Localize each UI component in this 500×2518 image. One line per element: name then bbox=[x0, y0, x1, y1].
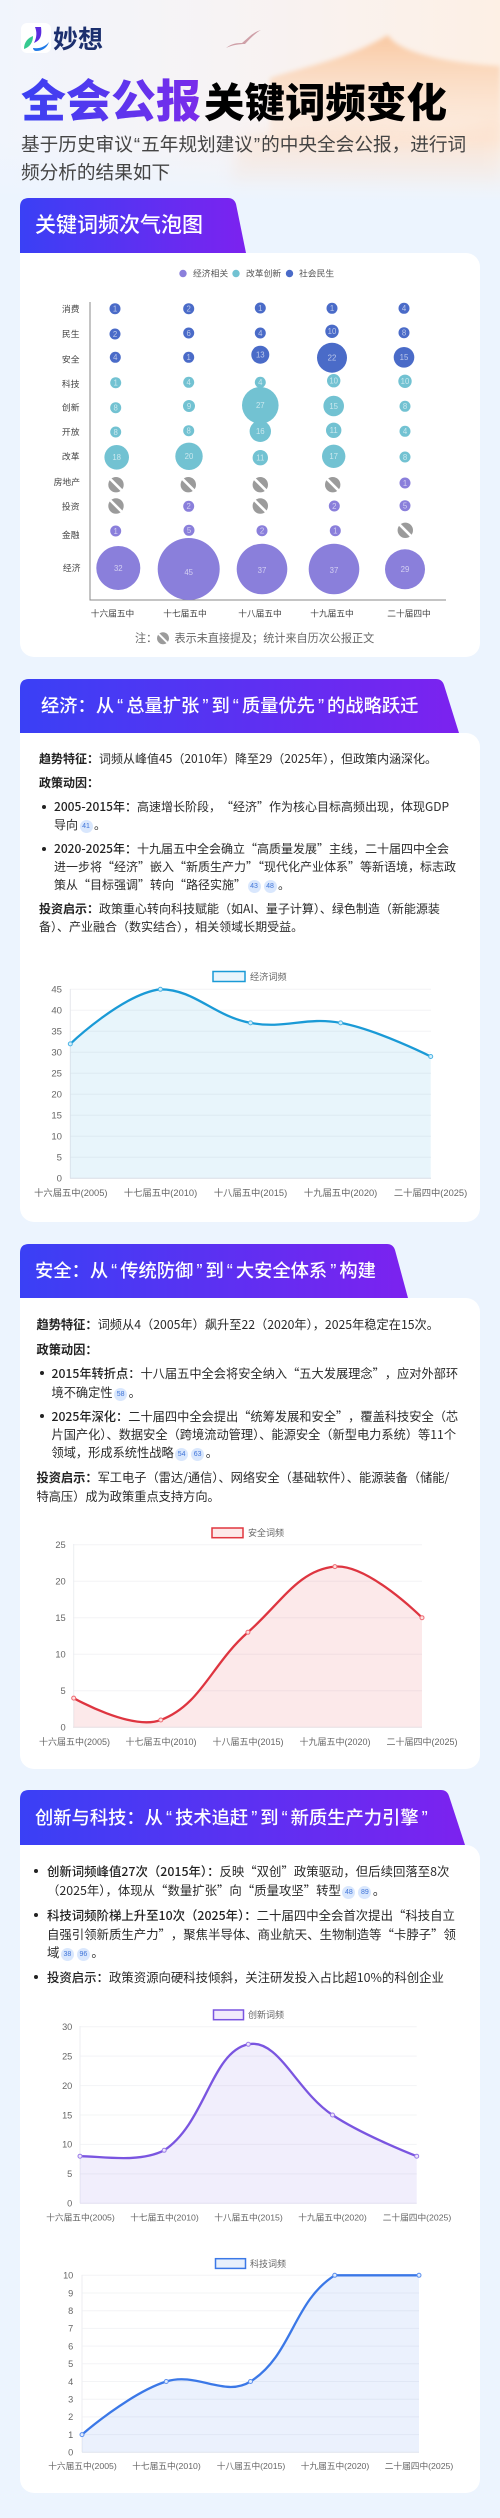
area and line bbox=[80, 2273, 421, 2452]
y labels: 开放 bbox=[62, 426, 80, 437]
text block: innovation and technology: 科技词频阶梯上升至10次（2025年）：二十届四中全会首次提出“科技自立 bbox=[47, 1906, 455, 1924]
text block: innovation and technology: 89 bbox=[361, 1889, 369, 1896]
y axis labels bbox=[51, 985, 62, 1185]
bubble values: 4 bbox=[403, 427, 408, 436]
text block: security: 片国产化）、数据安全（跨境流动管理）、能源安全（新型电力系统）等11个 bbox=[52, 1425, 456, 1443]
bubble values: 2 bbox=[260, 526, 264, 536]
y axis labels: 30 bbox=[51, 1048, 62, 1059]
text block: economy: 43 bbox=[250, 883, 258, 890]
x axis labels: 十八届五中(2015) bbox=[217, 2460, 285, 2471]
y axis labels: 35 bbox=[51, 1027, 62, 1038]
y axis labels: 3 bbox=[68, 2394, 73, 2404]
y axis labels: 1 bbox=[68, 2430, 73, 2440]
y axis labels: 7 bbox=[68, 2324, 73, 2334]
x labels: 十七届五中 bbox=[163, 607, 207, 618]
bubble chart bbox=[54, 268, 446, 645]
x axis labels bbox=[39, 1736, 458, 1747]
bubble values: 8 bbox=[187, 426, 191, 436]
y labels: 金融 bbox=[62, 529, 80, 540]
legend: 科技词频 bbox=[250, 2258, 286, 2269]
y axis labels: 0 bbox=[67, 2199, 72, 2209]
y axis labels: 25 bbox=[62, 2051, 72, 2061]
y axis labels: 15 bbox=[62, 2110, 72, 2120]
x axis labels: 二十届四中(2025) bbox=[386, 1736, 458, 1747]
legend bbox=[214, 2009, 284, 2020]
legend bbox=[213, 971, 287, 982]
y axis labels bbox=[63, 2271, 73, 2458]
x labels: 十八届五中 bbox=[238, 607, 282, 618]
bubble values: 10 bbox=[328, 327, 337, 336]
text block: economy: 政策动因： bbox=[39, 774, 99, 791]
logo wordmark: 妙想 bbox=[53, 20, 103, 56]
x axis labels: 十九届五中(2020) bbox=[304, 1187, 377, 1198]
text block: security: 特高压）成为政策重点支持方向。 bbox=[36, 1486, 220, 1504]
axes bbox=[90, 302, 446, 600]
y axis labels: 10 bbox=[55, 1650, 66, 1660]
legend bbox=[216, 2258, 286, 2269]
text block: innovation and technology: 48 bbox=[345, 1889, 353, 1896]
bubble values: 13 bbox=[256, 350, 265, 360]
card: economy bbox=[20, 733, 480, 1222]
bubble values: 11 bbox=[330, 426, 338, 435]
bubble values: 17 bbox=[329, 452, 338, 461]
y labels bbox=[54, 303, 81, 573]
legend: 创新词频 bbox=[248, 2009, 284, 2020]
y axis labels: 5 bbox=[68, 2359, 73, 2369]
title: 全会公报 bbox=[21, 65, 201, 130]
x axis labels: 十九届五中(2020) bbox=[299, 1736, 371, 1747]
area and line bbox=[78, 2042, 419, 2203]
x labels: 十九届五中 bbox=[310, 607, 354, 618]
text block: economy: 2005-2015年：高速增长阶段，“经济”作为核心目标高频出现，体现GDP bbox=[54, 798, 449, 815]
line chart: economy bbox=[34, 970, 467, 1198]
text block: innovation and technology: 创新词频峰值27次（2015年）：反映“双创”政策驱动，但后续回落至8次 bbox=[47, 1862, 449, 1880]
bubble values: 10 bbox=[401, 377, 410, 386]
bubble values: 15 bbox=[400, 353, 409, 362]
text block: innovation and technology: 96 bbox=[79, 1951, 87, 1958]
text block: security bbox=[36, 1315, 458, 1504]
text block: economy: 41 bbox=[82, 823, 90, 830]
bubble values: 1 bbox=[403, 479, 407, 488]
bubble values: 1 bbox=[258, 304, 262, 313]
x axis labels: 十六届五中(2005) bbox=[39, 1736, 110, 1747]
text block: innovation and technology: 38 bbox=[63, 1951, 71, 1958]
y axis labels: 15 bbox=[55, 1613, 66, 1623]
bubble values: 4 bbox=[113, 353, 118, 362]
heading: economy bbox=[20, 679, 459, 733]
y axis labels: 4 bbox=[68, 2377, 73, 2387]
y axis labels: 10 bbox=[63, 2271, 73, 2281]
text block: economy: 投资启示：政策重心转向科技赋能（如AI、量子计算）、绿色制造（新能源装 bbox=[39, 900, 440, 917]
text block: innovation and technology: 投资启示：政策资源向硬科技倾斜，关注研发投入占比超10%的科创企业 bbox=[47, 1968, 444, 1986]
bubble values: 1 bbox=[113, 304, 117, 314]
bubbles: economy bbox=[96, 478, 425, 600]
y axis labels: 10 bbox=[62, 2140, 72, 2150]
bubble values: 8 bbox=[114, 404, 118, 412]
x axis labels bbox=[34, 1187, 467, 1198]
x axis labels: 十七届五中(2010) bbox=[124, 1187, 197, 1198]
text block: security: 58 bbox=[117, 1390, 124, 1398]
x axis labels: 十八届五中(2015) bbox=[212, 1736, 284, 1747]
y axis labels: 0 bbox=[61, 1723, 66, 1733]
bubble values: 1 bbox=[114, 527, 118, 536]
bubble values: 22 bbox=[328, 354, 336, 362]
bubble values: 2 bbox=[187, 502, 191, 511]
y axis labels: 6 bbox=[68, 2341, 73, 2351]
x axis labels: 二十届四中(2025) bbox=[385, 2460, 453, 2471]
y labels: 改革 bbox=[62, 450, 80, 462]
heading: innovation and technology: 创新与科技：从“技术追赶”到“新质生产力引擎” bbox=[35, 1807, 428, 1828]
y labels: 创新 bbox=[62, 402, 80, 412]
x axis labels bbox=[46, 2211, 451, 2222]
bubble values: 8 bbox=[403, 453, 407, 462]
bubble values: 4 bbox=[258, 378, 263, 387]
subtitle: 频分析的结果如下 bbox=[21, 162, 170, 183]
x axis labels: 十七届五中(2010) bbox=[130, 2211, 199, 2222]
y axis labels: 20 bbox=[51, 1090, 62, 1101]
x labels: 十六届五中 bbox=[91, 607, 134, 618]
bubble values: 8 bbox=[402, 328, 406, 338]
heading: innovation and technology bbox=[20, 1790, 465, 1845]
y labels: 房地产 bbox=[54, 476, 80, 487]
bubble values: 29 bbox=[401, 565, 409, 574]
line chart: security bbox=[39, 1527, 458, 1747]
bubble values: 16 bbox=[256, 427, 265, 436]
x axis labels: 十六届五中(2005) bbox=[34, 1187, 107, 1198]
title bbox=[21, 65, 447, 130]
y labels: 科技 bbox=[62, 378, 80, 389]
y axis labels: 45 bbox=[51, 985, 62, 996]
x axis labels: 十九届五中(2020) bbox=[301, 2460, 369, 2471]
y labels: 投资 bbox=[62, 500, 80, 512]
subtitle: 基于历史审议“五年规划建议”的中央全会公报，进行词 bbox=[21, 134, 466, 155]
bubble values: 32 bbox=[114, 564, 123, 573]
text block: economy: 趋势特征：词频从峰值45（2010年）降至29（2025年），但政策内涵深化。 bbox=[39, 750, 437, 767]
bubble values: 37 bbox=[258, 566, 266, 575]
line chart: innovation bbox=[46, 2009, 451, 2222]
y axis labels: 9 bbox=[68, 2288, 73, 2298]
bubble values: 5 bbox=[187, 526, 192, 535]
text block: security: 54 bbox=[178, 1451, 186, 1458]
y axis labels: 5 bbox=[57, 1153, 62, 1164]
bubble values: 1 bbox=[333, 526, 337, 536]
legend bbox=[179, 268, 334, 279]
bubble values: 1 bbox=[114, 378, 118, 388]
x axis labels: 十九届五中(2020) bbox=[298, 2211, 367, 2222]
x axis labels: 十七届五中(2010) bbox=[125, 1736, 197, 1747]
text block: security: 2025年深化：二十届四中全会提出“统筹发展和安全”，覆盖科技安全（芯 bbox=[52, 1406, 458, 1424]
card: innovation and technology bbox=[20, 1845, 480, 2493]
x axis labels bbox=[48, 2460, 453, 2471]
bubbles: society bbox=[110, 302, 414, 373]
text block: security: 2015年转折点：十八届五中全会将安全纳入“五大发展理念”，应对外部环 bbox=[52, 1364, 458, 1382]
area and line bbox=[72, 1565, 424, 1727]
y axis labels: 40 bbox=[51, 1006, 62, 1017]
text block: security: 领域，形成系统性战略 。 bbox=[52, 1443, 218, 1461]
y axis labels: 15 bbox=[51, 1111, 62, 1122]
text block: security: 境不确定性 。 bbox=[52, 1382, 141, 1400]
text block: security: 政策动因： bbox=[36, 1340, 98, 1358]
text block: economy: 策从“目标强调”转向“路径实施” 。 bbox=[54, 876, 290, 893]
x axis labels: 二十届四中(2025) bbox=[383, 2211, 451, 2222]
y axis labels: 2 bbox=[68, 2412, 73, 2422]
y axis labels bbox=[55, 1540, 66, 1733]
bubble values: 6 bbox=[187, 329, 191, 338]
y labels: 安全 bbox=[62, 354, 80, 364]
bubble values: 37 bbox=[330, 566, 338, 575]
bubble values: 45 bbox=[184, 568, 194, 577]
y axis labels: 30 bbox=[62, 2022, 72, 2032]
text block: innovation and technology bbox=[34, 1862, 456, 1986]
legend bbox=[212, 1527, 284, 1538]
note: 表示未直接提及；统计来自历次公报正文 bbox=[174, 631, 374, 645]
title: 关键词频变化 bbox=[204, 70, 447, 129]
text block: economy: 2020-2025年：十九届五中全会确立“高质量发展”主线，二十届四中全会 bbox=[54, 840, 449, 857]
subtitle bbox=[21, 134, 466, 183]
note: 注： bbox=[135, 631, 157, 645]
bubble values: 4 bbox=[258, 329, 263, 338]
area and line bbox=[68, 987, 433, 1178]
text block: innovation and technology: （2025年），体现从“数量扩张”向“质量攻坚”转型 。 bbox=[47, 1881, 385, 1899]
bubble values: 18 bbox=[112, 453, 121, 462]
y axis labels bbox=[62, 2022, 72, 2209]
bubble values: 11 bbox=[256, 454, 264, 462]
bubble values: 4 bbox=[187, 378, 192, 387]
text block: innovation and technology: 域 。 bbox=[47, 1943, 104, 1961]
heading: bubble chart: 关键词频次气泡图 bbox=[35, 214, 203, 237]
x labels: 二十届四中 bbox=[387, 607, 431, 618]
x axis labels: 十六届五中(2005) bbox=[48, 2460, 117, 2471]
bubble values: 8 bbox=[403, 402, 407, 411]
bubble values: 20 bbox=[185, 452, 194, 461]
bubbles: reform and innovation bbox=[104, 374, 412, 470]
bubble values: 8 bbox=[114, 428, 118, 437]
panel: innovation and technology bbox=[20, 1790, 480, 2493]
bubble values: 10 bbox=[329, 376, 339, 386]
text block: security: 63 bbox=[194, 1451, 202, 1458]
y axis labels: 20 bbox=[55, 1576, 66, 1586]
text block: economy bbox=[39, 750, 456, 935]
panel: security bbox=[20, 1244, 480, 1769]
heading: economy: 经济：从“总量扩张”到“质量优先”的战略跃迁 bbox=[41, 695, 418, 716]
bubble values: 9 bbox=[187, 402, 191, 411]
y axis labels: 5 bbox=[67, 2169, 72, 2179]
bubbles: not mentioned bbox=[108, 477, 413, 538]
bubble values: 15 bbox=[329, 402, 339, 411]
heading: security: 安全：从“传统防御”到“大安全体系”构建 bbox=[35, 1260, 376, 1281]
y axis labels: 0 bbox=[68, 2448, 73, 2458]
y axis labels: 10 bbox=[51, 1132, 62, 1143]
card: bubble chart bbox=[20, 253, 480, 657]
card: security bbox=[20, 1298, 480, 1769]
text block: innovation and technology: 自强引领新质生产力”，聚焦半导体、商业航天、生物制造等“卡脖子”领 bbox=[47, 1924, 456, 1942]
text block: economy: 进一步将“经济”嵌入“新质生产力”“现代化产业体系”等新语境，标志政 bbox=[54, 858, 456, 875]
bubble values: 2 bbox=[113, 330, 117, 339]
legend: 社会民生 bbox=[299, 268, 334, 279]
bubble values: 2 bbox=[332, 502, 336, 511]
x axis labels: 二十届四中(2025) bbox=[394, 1187, 467, 1198]
logo bbox=[21, 20, 103, 56]
heading: bubble chart bbox=[20, 198, 246, 253]
bubble values: 1 bbox=[187, 353, 191, 362]
legend: 改革创新 bbox=[246, 268, 281, 279]
x axis labels: 十八届五中(2015) bbox=[214, 1187, 287, 1198]
heading: security bbox=[20, 1244, 408, 1298]
y axis labels: 8 bbox=[68, 2306, 73, 2316]
x axis labels: 十七届五中(2010) bbox=[132, 2460, 201, 2471]
legend: 经济词频 bbox=[250, 971, 287, 982]
x axis labels: 十六届五中(2005) bbox=[46, 2211, 115, 2222]
bubble values: 4 bbox=[402, 304, 407, 313]
bubble values: 1 bbox=[330, 304, 334, 313]
x axis labels: 十八届五中(2015) bbox=[214, 2211, 283, 2222]
y labels: 民生 bbox=[62, 328, 80, 339]
bubble values: 27 bbox=[256, 401, 265, 410]
text block: economy: 备）、产业融合（数实结合），相关领域长期受益。 bbox=[39, 918, 303, 935]
bubble values bbox=[112, 304, 410, 577]
y axis labels: 25 bbox=[51, 1069, 62, 1080]
legend: 经济相关 bbox=[193, 268, 228, 279]
icon: logo mark bbox=[21, 23, 51, 53]
panel: economy bbox=[20, 679, 480, 1222]
y axis labels: 0 bbox=[57, 1174, 62, 1185]
y axis labels: 20 bbox=[62, 2081, 72, 2091]
y labels: 消费 bbox=[62, 303, 80, 314]
line chart: technology bbox=[48, 2258, 453, 2471]
panel: bubble chart bbox=[20, 198, 480, 657]
y axis labels: 5 bbox=[61, 1686, 66, 1696]
bubble values: 5 bbox=[403, 502, 408, 510]
y labels: 经济 bbox=[63, 562, 81, 573]
legend: 安全词频 bbox=[248, 1527, 284, 1538]
text block: economy: 48 bbox=[266, 883, 274, 890]
text block: economy: 导向 。 bbox=[54, 816, 106, 833]
header background: peach mountains bbox=[114, 0, 500, 186]
x labels bbox=[91, 607, 431, 618]
y axis labels: 25 bbox=[55, 1540, 66, 1550]
text block: security: 投资启示：军工电子（雷达/通信）、网络安全（基础软件）、能源装备（储能/ bbox=[36, 1468, 449, 1486]
text block: security: 趋势特征：词频从4（2005年）飙升至22（2020年），2025年稳定在15次。 bbox=[36, 1315, 439, 1333]
bubble values: 2 bbox=[187, 304, 191, 314]
